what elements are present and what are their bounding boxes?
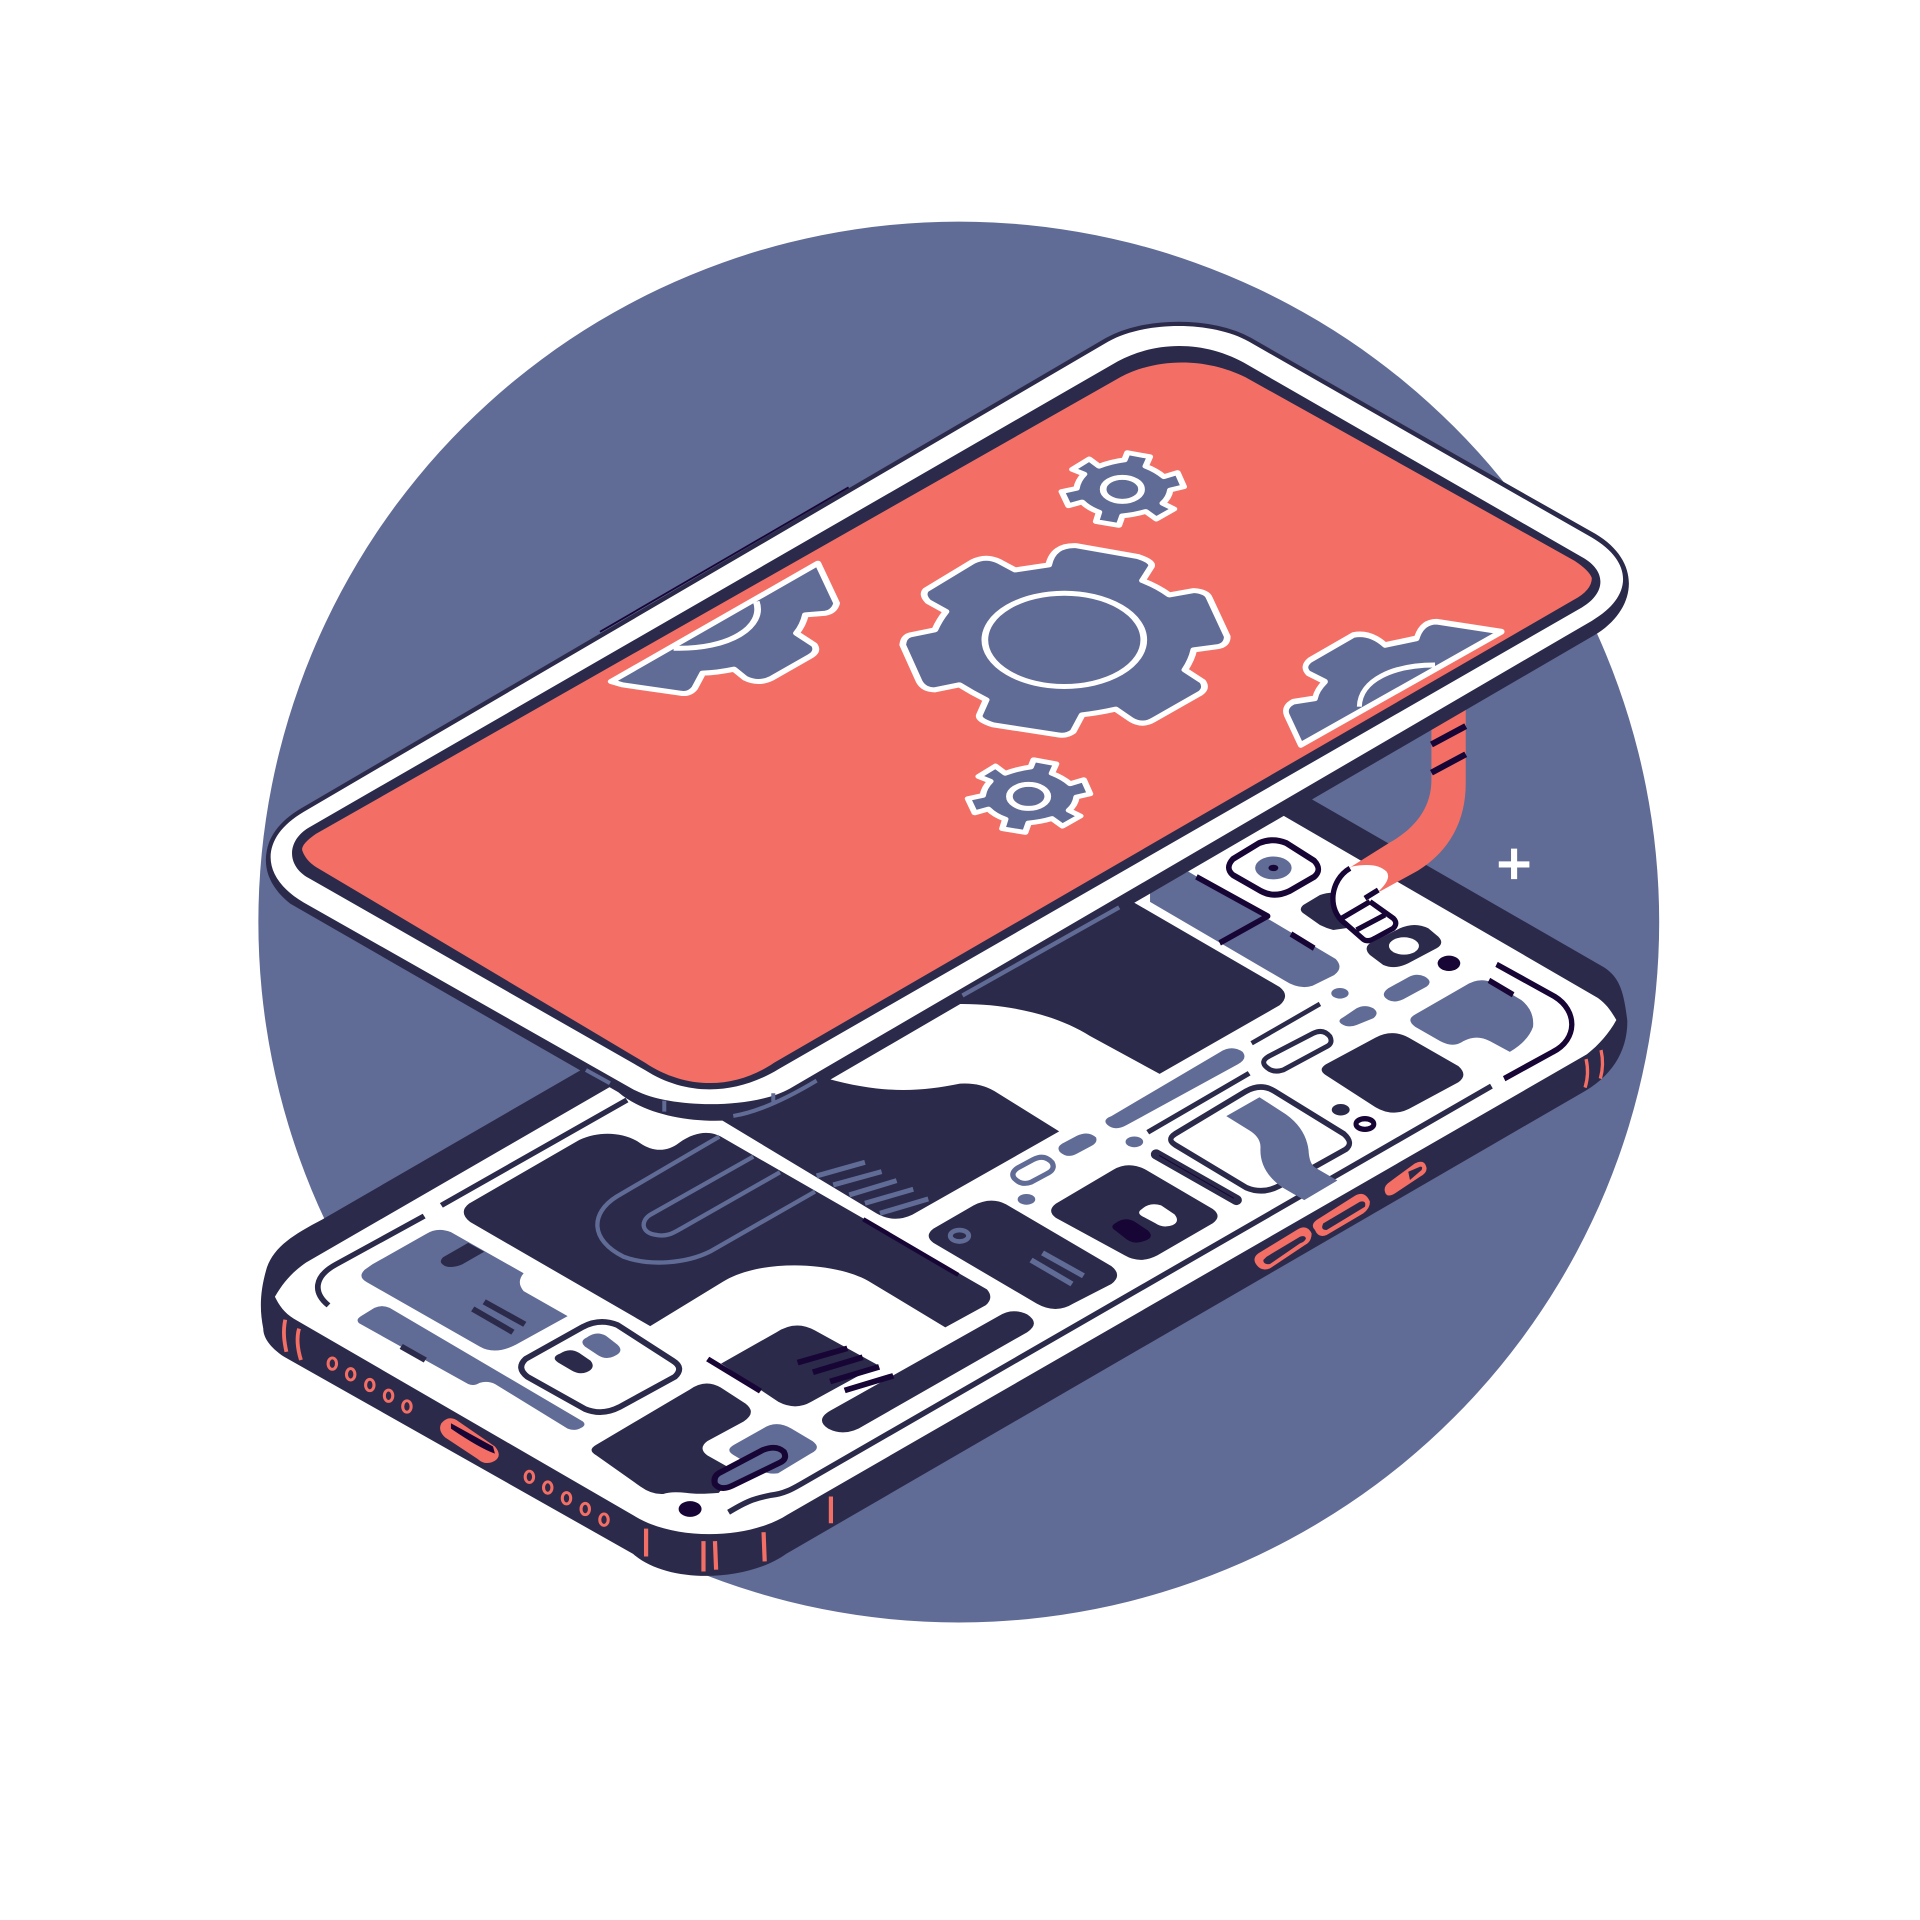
dark board panel above diagonal xyxy=(720,1065,1059,1219)
darkest pill on chip xyxy=(1112,1219,1151,1243)
connector outline xyxy=(1333,868,1396,941)
darkest ring xyxy=(1356,1119,1374,1129)
speaker holes left xyxy=(328,1358,411,1412)
outlined pill xyxy=(714,1448,785,1488)
darkest tick on blue panel xyxy=(1291,934,1314,948)
charging port slot xyxy=(451,1423,495,1454)
dark pill in chip xyxy=(555,1350,593,1373)
button three xyxy=(1385,1162,1427,1196)
top small gear xyxy=(1062,453,1184,525)
flex cable in coral xyxy=(1347,704,1466,891)
plus sign xyxy=(1499,849,1529,879)
frame thin outline xyxy=(271,326,1623,1104)
long blue strip xyxy=(358,1306,584,1430)
hash marks xyxy=(817,1162,928,1213)
left corner ticks xyxy=(284,1320,301,1360)
blue dot xyxy=(1126,1136,1143,1147)
bottom small gear hole xyxy=(1009,784,1048,808)
charging port xyxy=(440,1418,499,1463)
big dark diamond xyxy=(1322,1033,1463,1113)
outlined chip xyxy=(521,1322,679,1412)
small blue pill xyxy=(1058,1133,1096,1156)
darkest hash lines xyxy=(798,1348,893,1390)
darkest tick line xyxy=(708,1359,760,1391)
traced wires group xyxy=(597,1137,958,1275)
background circle xyxy=(258,222,1659,1622)
right clipped gear xyxy=(1286,622,1502,745)
blue pill two xyxy=(1339,1006,1377,1026)
top right details xyxy=(1252,865,1460,1071)
bottom corner ticks xyxy=(646,1496,831,1571)
dark pill in block xyxy=(441,1243,484,1267)
blue pill one xyxy=(1384,975,1430,1001)
button two xyxy=(1313,1194,1370,1236)
camera pill xyxy=(1367,925,1441,967)
dark diagonal line xyxy=(1148,1073,1249,1132)
ring on chip xyxy=(950,1230,969,1241)
frame lower thickness xyxy=(266,322,1629,1121)
gear body xyxy=(1286,622,1502,745)
blue battery block xyxy=(361,1230,568,1351)
left frame lines xyxy=(318,1100,627,1305)
bottom dark block xyxy=(592,1383,751,1494)
long dark pill xyxy=(822,1311,1034,1432)
blue square xyxy=(729,1424,817,1474)
top edge dark accent xyxy=(600,487,849,632)
right part of the board xyxy=(1150,840,1603,1200)
camera pupil xyxy=(1268,865,1278,871)
white lens xyxy=(1389,937,1419,955)
button two slot xyxy=(1322,1201,1365,1230)
lines on chip xyxy=(1031,1253,1083,1284)
speaker holes right xyxy=(525,1471,608,1525)
chassis white face xyxy=(275,757,1616,1534)
dark blob under connector xyxy=(1301,893,1357,930)
outlined module xyxy=(1171,1087,1349,1191)
frame lines on left and lower edge xyxy=(729,1086,1491,1512)
blue pill in chip xyxy=(582,1333,620,1358)
white frame xyxy=(271,326,1623,1104)
blue outlined pill xyxy=(1013,1157,1053,1183)
blue line under frame xyxy=(962,907,1119,996)
button three slot xyxy=(1408,1167,1422,1180)
gear hole arc xyxy=(1359,665,1435,707)
white connector head xyxy=(1334,865,1396,941)
right frame tick xyxy=(1489,980,1513,995)
outer wire xyxy=(597,1137,815,1263)
left gear hole arc xyxy=(674,602,758,648)
blue marks on frame underside xyxy=(586,1070,817,1116)
dark outlined pill xyxy=(1264,1031,1331,1071)
underside marks xyxy=(586,1070,817,1116)
thin line in bar xyxy=(1159,1155,1234,1198)
upper phone: screen panel xyxy=(266,322,1629,1121)
blue flex ribbon xyxy=(1226,1097,1337,1200)
right corner ticks xyxy=(1585,1050,1603,1088)
middle part of the board xyxy=(708,1048,1249,1432)
screw dot xyxy=(679,1501,702,1517)
chassis body xyxy=(261,724,1627,1576)
dark seam line xyxy=(863,1219,958,1275)
bottom small gear xyxy=(968,760,1090,832)
dark sensor dot xyxy=(1438,956,1460,971)
angled darkest line xyxy=(1196,877,1268,943)
left clipped gear xyxy=(611,563,837,693)
upper dark board panel xyxy=(931,857,1285,1074)
lower phone: chassis xyxy=(261,704,1627,1576)
right frame curve xyxy=(1497,964,1572,1079)
screen bezel xyxy=(292,346,1600,1089)
top small gear hole xyxy=(1103,477,1142,501)
white pill on chip xyxy=(1139,1204,1177,1226)
button one xyxy=(1254,1227,1312,1269)
dark tick on strip xyxy=(401,1346,425,1360)
dark long bar xyxy=(1156,1154,1237,1200)
square chip xyxy=(1051,1165,1218,1260)
cable marks xyxy=(1431,726,1466,773)
chip with ring and lines xyxy=(929,1201,1117,1309)
small dark dot xyxy=(1332,1104,1350,1115)
dark line xyxy=(1252,1004,1320,1043)
small dark block xyxy=(721,1325,878,1406)
coral screen xyxy=(302,362,1592,1083)
camera lens xyxy=(1255,856,1292,879)
blue dot lower xyxy=(1018,1194,1035,1205)
gears traced group xyxy=(611,453,1227,832)
right blue shape xyxy=(1410,980,1533,1052)
large dark board panel with wires xyxy=(464,1133,990,1327)
two dark lines xyxy=(473,1302,525,1332)
camera outline xyxy=(1229,840,1318,895)
side buttons xyxy=(1254,1162,1427,1269)
large gear xyxy=(903,546,1227,735)
large gear hole xyxy=(985,593,1144,686)
small blue dot xyxy=(1331,988,1349,999)
button one slot xyxy=(1263,1236,1306,1264)
inner wire xyxy=(644,1157,780,1235)
left part of the board xyxy=(284,1100,831,1571)
long blue pill xyxy=(1105,1048,1244,1128)
upper blue panel xyxy=(1150,871,1340,987)
